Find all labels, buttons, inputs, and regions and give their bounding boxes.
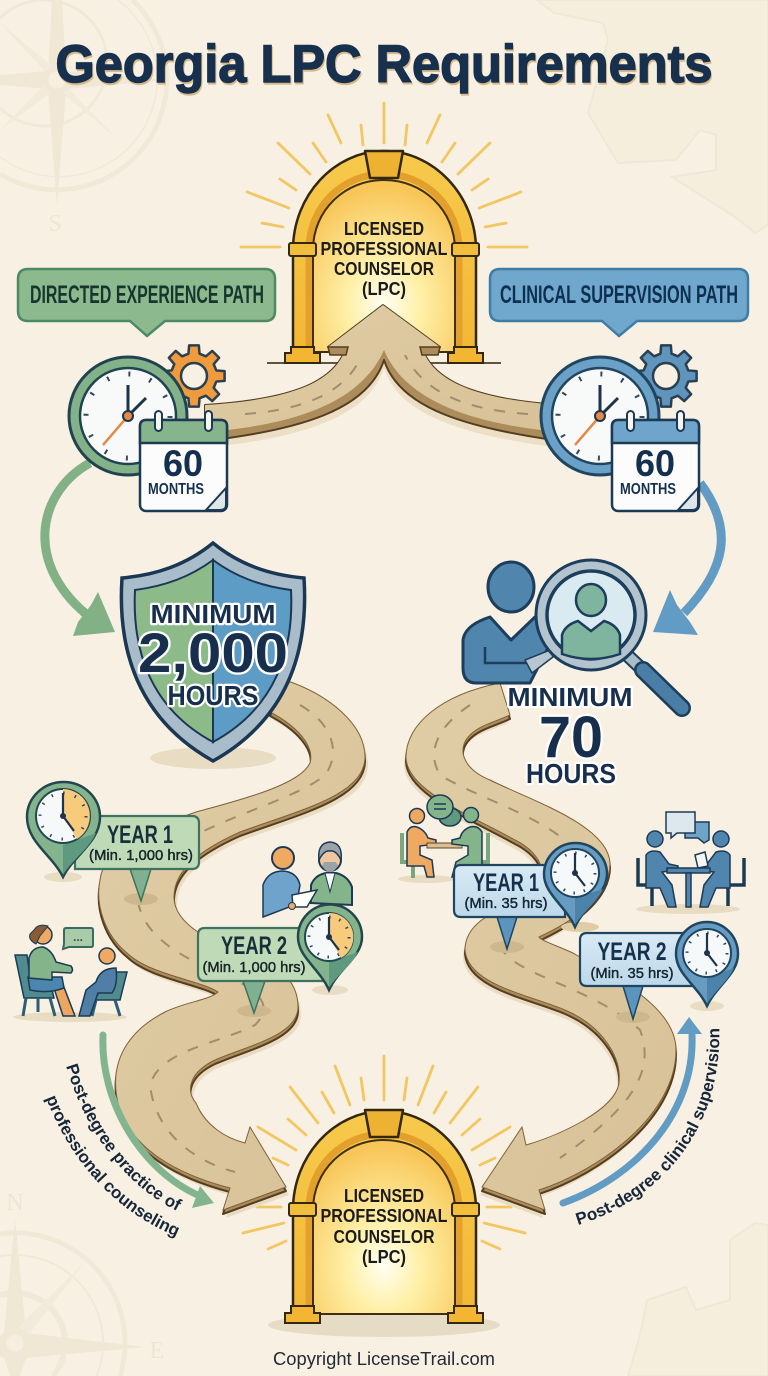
marker: right year 2 xyxy=(580,922,738,1023)
arch label: COUNSELOR xyxy=(334,259,434,279)
icon: blue clock xyxy=(541,357,659,475)
text: minimum 70 hours: MINIMUM xyxy=(508,682,632,712)
copyright: Copyright LicenseTrail.com xyxy=(273,1349,495,1369)
compass: bottom left: E xyxy=(150,1338,164,1364)
scene: counselor and client xyxy=(13,925,127,1022)
arrow: post-degree practice xyxy=(103,1035,214,1208)
marker: left year 1 xyxy=(27,782,199,905)
marker: right year 1 xyxy=(454,843,607,953)
arch label xyxy=(320,1186,448,1267)
scene: blue table talk xyxy=(636,812,744,914)
bottom arch: LPC goal xyxy=(268,1110,500,1337)
right winding road xyxy=(404,683,676,1218)
shield text xyxy=(138,599,288,711)
arch label: LICENSED xyxy=(344,219,424,239)
arch label: LICENSED xyxy=(344,1186,424,1206)
arch label: PROFESSIONAL xyxy=(320,1206,448,1226)
year label: YEAR 2 xyxy=(598,938,666,966)
map: top right xyxy=(537,0,768,233)
year label: YEAR 2 xyxy=(221,932,287,960)
text: post-degree practice of professional counseling: professional counseling xyxy=(43,1096,179,1238)
icon: green calendar 60 months: 60 xyxy=(163,443,203,484)
arrow: post-degree clinical supervision xyxy=(563,1017,702,1203)
year label xyxy=(590,938,674,982)
compass: top left: S xyxy=(48,211,62,237)
shield text: 2,000 xyxy=(138,621,288,684)
shield text: MINIMUM xyxy=(150,599,276,629)
icon: blue calendar 60 months xyxy=(612,411,699,511)
year label xyxy=(89,821,193,864)
shield text: HOURS xyxy=(168,680,258,711)
compass: bottom left: N xyxy=(6,1190,24,1216)
icon: blue calendar 60 months: MONTHS xyxy=(620,481,676,498)
icon: blue calendar 60 months: 60 xyxy=(635,443,675,484)
arch label: COUNSELOR xyxy=(334,1227,434,1247)
top road: merging paths xyxy=(205,305,560,448)
left winding road xyxy=(99,680,368,1218)
icon: green calendar 60 months xyxy=(140,411,227,511)
pin xyxy=(298,904,362,990)
bubble: directed experience path xyxy=(18,269,275,336)
rays xyxy=(241,103,527,247)
title: Georgia LPC Requirements xyxy=(56,35,712,94)
icon: magnifying glass xyxy=(525,560,682,708)
top arch: LPC goal xyxy=(241,103,527,363)
scene: counselor and client: ... xyxy=(73,930,83,944)
arch label: (LPC) xyxy=(362,279,406,299)
arch label xyxy=(320,219,448,299)
icon: blue gear xyxy=(635,345,697,407)
icon: green calendar 60 months: MONTHS xyxy=(148,481,204,498)
text: post-degree clinical supervision: Post-degree clinical supervision xyxy=(575,1029,720,1225)
bubble: clinical supervision path xyxy=(490,269,748,336)
text: post-degree practice of professional counseling: Post-degree practice of xyxy=(66,1064,183,1210)
icon: person under magnifier xyxy=(463,560,682,708)
arch label: (LPC) xyxy=(362,1247,406,1267)
year label xyxy=(202,932,306,976)
icon: orange gear xyxy=(163,345,225,407)
pin xyxy=(544,843,607,927)
year label: (Min. 35 hrs) xyxy=(590,965,674,982)
bubble: directed experience path: DIRECTED EXPERIENCE PATH xyxy=(30,281,264,309)
year label: (Min. 1,000 hrs) xyxy=(202,959,306,976)
arch label: PROFESSIONAL xyxy=(320,239,448,259)
text: minimum 70 hours xyxy=(508,682,632,789)
bottom arch rays xyxy=(243,1056,525,1249)
scene: orange and green table talk xyxy=(398,795,488,883)
shield: minimum 2,000 hours xyxy=(121,543,305,769)
icon: green clock xyxy=(69,357,187,475)
marker: left year 2 xyxy=(198,904,362,1017)
scene: supervisor meeting xyxy=(263,842,352,917)
year label: (Min. 35 hrs) xyxy=(464,895,548,912)
compass: top left xyxy=(0,0,167,237)
year label: YEAR 1 xyxy=(473,869,539,897)
map: bottom right xyxy=(628,1223,768,1376)
arrow: green curved xyxy=(45,463,115,636)
text: minimum 70 hours: 70 xyxy=(539,705,603,770)
year label: YEAR 1 xyxy=(107,821,173,849)
compass: bottom left xyxy=(0,1190,164,1376)
year label xyxy=(464,869,548,912)
pin xyxy=(27,782,100,877)
pin xyxy=(676,922,738,1006)
text: minimum 70 hours: HOURS xyxy=(526,758,616,789)
arrow: blue curved xyxy=(653,483,721,635)
year label: (Min. 1,000 hrs) xyxy=(89,847,193,864)
